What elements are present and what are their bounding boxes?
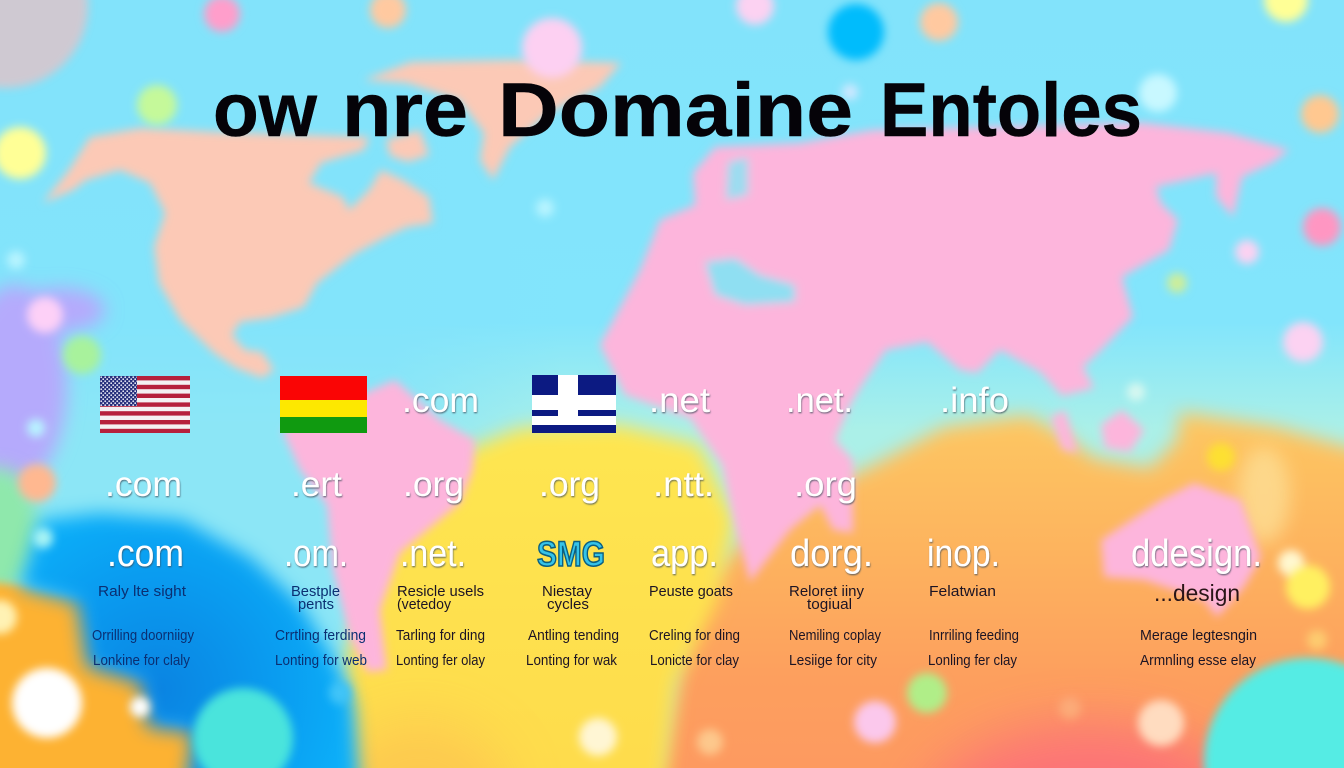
row 3 domain labels: dorg. bbox=[790, 533, 873, 575]
map: Black Sea and Caspian bbox=[705, 258, 795, 305]
detail line 1: Tarling for ding bbox=[396, 627, 485, 644]
descriptor text: (vetedoy bbox=[397, 596, 451, 613]
background blob: red glow bbox=[926, 702, 1206, 768]
detail line 1: Creling for ding bbox=[649, 627, 740, 644]
title: Domaine bbox=[498, 68, 853, 153]
detail line 2: Lonling fer clay bbox=[928, 652, 1017, 669]
row 1 domain labels: .com bbox=[402, 381, 479, 420]
flag: red yellow green bbox=[280, 376, 367, 433]
row 2 domain labels bbox=[105, 465, 857, 504]
row 2 domain labels: .org bbox=[794, 465, 857, 504]
map: Scandinavian gulf bbox=[726, 157, 748, 200]
descriptor text: Felatwian bbox=[929, 583, 996, 600]
background blob: deeper yellow lower left bbox=[350, 716, 502, 768]
map: Eurasia and Africa bbox=[600, 123, 1289, 582]
background blob: orange field bbox=[658, 400, 1344, 768]
background blob: grey corner bbox=[0, 0, 93, 93]
row 3 domain labels: app. bbox=[651, 533, 718, 575]
detail line 2: Lonting for wak bbox=[526, 652, 617, 669]
row 3 domain labels: .com bbox=[107, 533, 184, 575]
map: Southeast Asia islands bbox=[1051, 410, 1144, 453]
background blob: yellow streak right bbox=[1238, 447, 1290, 543]
descriptor text: cycles bbox=[547, 596, 589, 613]
detail line 2: Lonting for web bbox=[275, 652, 367, 669]
map: Australia bbox=[1101, 483, 1261, 617]
row 3 domain labels: .om. bbox=[284, 533, 348, 575]
flag: United States bbox=[100, 376, 190, 433]
background blob: teal lower middle bbox=[188, 683, 298, 768]
detail line 1: Merage legtesngin bbox=[1140, 627, 1257, 644]
descriptor text: Raly lte sight bbox=[98, 583, 187, 600]
map: Greenland and Arctic islands bbox=[364, 60, 621, 180]
descriptor text bbox=[98, 583, 996, 613]
row 1 domain labels bbox=[402, 381, 1009, 420]
descriptor text: Reloret iiny bbox=[789, 583, 864, 600]
row 3 domain labels bbox=[107, 533, 1262, 575]
descriptor text: Peuste goats bbox=[649, 583, 733, 600]
title: ow bbox=[213, 68, 318, 153]
map: South America bbox=[283, 380, 475, 672]
descriptor text: Resicle usels bbox=[397, 583, 484, 600]
detail line 1: Nemiling coplay bbox=[789, 627, 881, 644]
detail line 2: Lonting fer olay bbox=[396, 652, 485, 669]
title: nre bbox=[342, 68, 468, 153]
detail line 1: Orrilling doorniigy bbox=[92, 627, 194, 644]
detail line 2: Lonkine for claly bbox=[93, 652, 190, 669]
detail line 1: Crrtling ferding bbox=[275, 627, 366, 644]
row 2 domain labels: .org bbox=[539, 465, 600, 504]
background blob: teal lower right bbox=[1197, 651, 1344, 768]
flag: navy and white cross bbox=[532, 375, 616, 433]
title: Entoles bbox=[880, 68, 1142, 153]
map: North America bbox=[43, 128, 433, 378]
map: continents bbox=[43, 60, 1289, 672]
row 2 domain labels: .ert bbox=[291, 465, 342, 504]
background blob: deep blue wave bbox=[8, 500, 374, 768]
descriptor text: Bestple bbox=[291, 583, 340, 600]
row 2 domain labels: .ntt. bbox=[653, 465, 714, 504]
row 1 domain labels: .net bbox=[649, 381, 710, 420]
row 2 domain labels: .com bbox=[105, 465, 182, 504]
row 1 domain labels: .net. bbox=[786, 381, 853, 420]
row 3 domain labels: ddesign. bbox=[1131, 533, 1262, 575]
logo: SMG: SMG bbox=[537, 535, 605, 574]
background blob: purple left bbox=[0, 285, 105, 485]
detail line 2: Armnling esse elay bbox=[1140, 652, 1256, 669]
subheading: design: ...design bbox=[1154, 580, 1240, 606]
descriptor text: Niestay bbox=[542, 583, 592, 600]
descriptor text: pents bbox=[298, 596, 334, 613]
detail line 2 bbox=[93, 652, 1256, 669]
detail line 1: Inrriling feeding bbox=[929, 627, 1019, 644]
row 3 domain labels: .net. bbox=[400, 533, 466, 575]
detail line 1: Antling tending bbox=[528, 627, 619, 644]
background blob: yellow field bbox=[334, 412, 740, 768]
detail line 1 bbox=[92, 627, 1257, 644]
detail line 2: Lonicte for clay bbox=[650, 652, 739, 669]
title bbox=[213, 68, 1142, 153]
descriptor text: togiual bbox=[807, 596, 852, 613]
detail line 2: Lesiige for city bbox=[789, 652, 877, 669]
background blob: orange lower-left bbox=[0, 576, 202, 768]
row 2 domain labels: .org bbox=[403, 465, 464, 504]
row 3 domain labels: inop. bbox=[927, 533, 1000, 575]
background blob: green left bbox=[0, 468, 38, 592]
row 1 domain labels: .info bbox=[940, 381, 1009, 420]
